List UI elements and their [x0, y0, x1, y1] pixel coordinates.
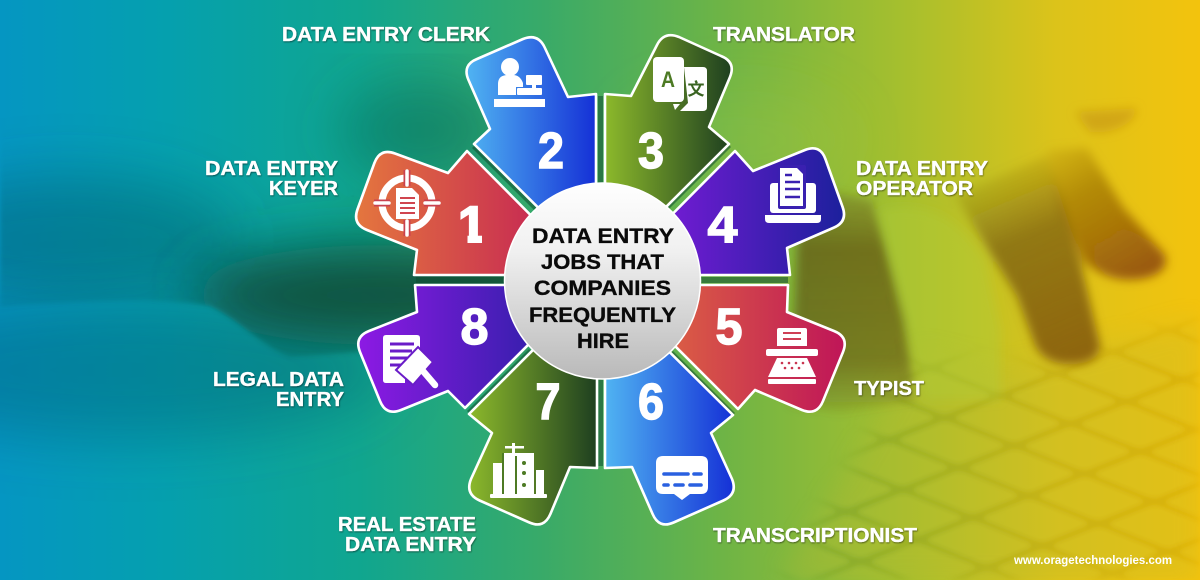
gap bars between segments [416, 96, 788, 466]
centre circle title: DATA ENTRY [532, 225, 674, 248]
label: data entry operator: OPERATOR [856, 178, 974, 200]
centre circle title [504, 183, 700, 379]
centre circle title: FREQUENTLY [529, 304, 676, 327]
label: real estate data entry: DATA ENTRY [345, 534, 477, 556]
number 4: 4 [708, 196, 738, 253]
icon: legal document with gavel [383, 335, 435, 385]
segment 1: data entry keyer [354, 150, 531, 276]
segment 3: translator [605, 35, 732, 259]
icon: laptop with document [765, 165, 821, 223]
label: real estate data entry [338, 514, 477, 556]
icon: translation cards: A [661, 67, 675, 92]
number 3: 3 [638, 122, 664, 179]
label: transcriptionist: TRANSCRIPTIONIST [713, 525, 917, 547]
segment 8: legal data entry [358, 285, 588, 412]
label: real estate data entry: REAL ESTATE [338, 514, 476, 536]
number 8: 8 [460, 298, 488, 355]
label: data entry clerk: DATA ENTRY CLERK [282, 24, 491, 46]
number 5: 5 [716, 298, 742, 355]
segment 7: real estate data entry [469, 293, 597, 524]
label: legal data entry [213, 369, 345, 411]
segment 4: data entry operator [612, 148, 844, 275]
label: typist: TYPIST [854, 378, 924, 400]
label: data entry keyer: KEYER [269, 178, 339, 200]
icon: translation cards [653, 57, 707, 111]
segment 5: typist [614, 285, 845, 412]
segment 2: data entry clerk [467, 37, 596, 259]
label: legal data entry: ENTRY [276, 389, 345, 411]
centre circle title: JOBS THAT [541, 251, 664, 274]
label: legal data entry: LEGAL DATA [213, 369, 344, 391]
number 6: 6 [638, 373, 664, 430]
centre circle title: COMPANIES [534, 277, 671, 300]
label: data entry keyer: DATA ENTRY [205, 158, 339, 180]
label: translator: TRANSLATOR [713, 24, 856, 46]
number 2: 2 [538, 122, 564, 179]
icon: typewriter [766, 328, 818, 384]
label: data entry keyer [205, 158, 339, 200]
icon: translation cards: 文 [688, 79, 704, 99]
icon: city buildings [490, 443, 547, 498]
label: data entry operator: DATA ENTRY [856, 158, 989, 180]
icon: target with document [374, 170, 440, 236]
centre circle title: HIRE [577, 330, 629, 353]
number 7: 7 [536, 373, 560, 430]
number 1: 1 [458, 196, 486, 253]
label: data entry operator [856, 158, 989, 200]
icon: chat bubble with caption lines [656, 456, 708, 500]
icon: clerk at cash register [494, 58, 545, 107]
website url: www.oragetechnologies.com [1013, 555, 1172, 567]
segment 6: transcriptionist [605, 293, 734, 524]
